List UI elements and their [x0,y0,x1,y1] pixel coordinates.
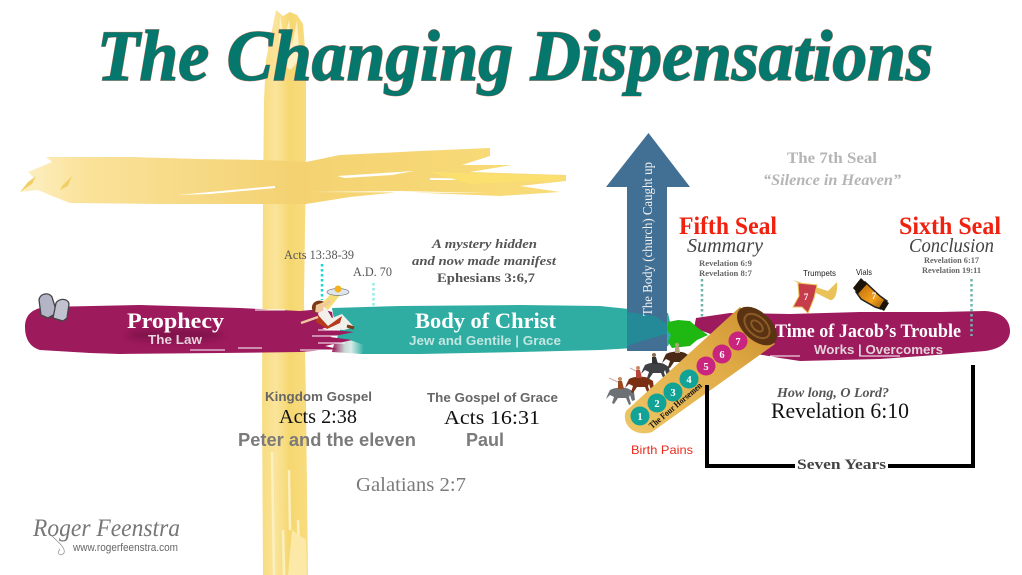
text: Fifth Seal: Summary [687,235,763,257]
title: The Changing Dispensations [97,16,933,96]
brush band: Prophecy [25,305,354,354]
logo [32,515,180,555]
title: The Changing Dispensations [97,16,933,96]
scroll seals: 5 [703,362,709,373]
label: Acts 13:38-39: Acts 13:38-39 [284,247,354,262]
text: Gospel of Grace [427,391,558,450]
text: Fifth Seal: Revelation 8:7 [699,268,753,278]
icon: vial: 7 [872,291,877,301]
dotted line: Acts 13 [321,264,323,300]
text: Kingdom Gospel [238,390,416,450]
scroll end [730,299,784,353]
label: Birth Pains: Birth Pains [631,443,693,457]
icon: trumpet [793,280,837,313]
text: Sixth Seal: Conclusion [909,235,994,257]
cross: horizontal beam [20,148,566,204]
text: Prophecy [127,308,224,347]
scroll seals: 1 [637,412,643,423]
dotted line: Fifth Seal [701,279,703,318]
scroll seals: 4 [686,375,692,386]
text: Body of Christ [409,308,561,348]
label: Seven Years: Seven Years [797,457,886,473]
text: Kingdom Gospel: Peter and the eleven [238,430,416,450]
brush band: Body of Christ [332,305,672,354]
text: mystery hidden: Ephesians 3:6,7 [437,270,536,285]
scroll [625,299,784,433]
text: Sixth Seal: Revelation 19:11 [922,265,981,275]
arrow label: The Body (church) Caught up [641,162,656,316]
text: 7th seal: “Silence in Heaven” [763,172,901,189]
text: Gospel of Grace: The Gospel of Grace [427,391,558,405]
text: Fifth Seal [679,213,777,278]
four horsemen [606,343,691,405]
text: Time of Jacob's Trouble: Works | Overcomers [814,342,943,357]
label: Vials: Vials [856,267,872,277]
text: How long: How long, O Lord? [776,385,889,400]
text: Prophecy: Prophecy [127,308,224,333]
brush band: Time of Jacob's Trouble [694,311,1010,361]
logo: Roger Feenstra [32,515,180,542]
horse 1 [606,377,635,405]
text: Fifth Seal: Revelation 6:9 [699,258,752,268]
scroll label: The Four Horsemen [647,380,704,431]
label: A.D. 70: A.D. 70 [353,264,392,279]
streaks of teal over arrow [627,312,667,346]
text: Fifth Seal: Fifth Seal [679,213,777,240]
text: Gospel of Grace: Acts 16:31 [444,407,540,429]
text: 7th seal: The 7th Seal [787,150,878,167]
logo: www.rogerfeenstra.com [72,542,178,554]
text: mystery hidden: and now made manifest [412,253,556,268]
green brush [667,320,708,348]
label: Trumpets: Trumpets [803,268,836,278]
text: How long [771,385,909,423]
scroll body [625,307,775,433]
text: Prophecy: The Law [148,332,203,347]
scroll seals: 6 [719,350,725,361]
text: mystery hidden: A mystery hidden [431,236,537,251]
text: Sixth Seal: Sixth Seal [899,213,1001,240]
icon: vial [853,278,889,311]
text: Body of Christ: Body of Christ [415,308,557,333]
text: mystery hidden [412,236,556,285]
dotted line: A.D. 70 [372,283,375,335]
scroll seals: 2 [654,399,660,410]
scroll seals: 7 [735,337,741,348]
text: Time of Jacob's Trouble: Time of Jacob’s Trouble [775,321,961,342]
text: Sixth Seal [899,213,1001,275]
text: Body of Christ: Jew and Gentile | Grace [409,333,561,348]
text: Sixth Seal: Revelation 6:17 [924,255,980,265]
arrow: The Body caught up [606,133,690,351]
text: Gospel of Grace: Paul [466,430,504,450]
icon: trumpet: 7 [804,292,809,302]
text: How long: Revelation 6:10 [771,398,909,423]
text: Galatians: Galatians 2:7 [356,474,466,496]
bracket: seven years [707,365,973,466]
cross: vertical beam [262,10,308,575]
cross [20,10,566,575]
text: Time of Jacob's Trouble [775,321,961,357]
text: Kingdom Gospel: Acts 2:38 [279,406,357,428]
scroll seals: 3 [670,388,676,399]
text: Kingdom Gospel: Kingdom Gospel [265,390,372,404]
dotted line: Sixth Seal [970,279,973,336]
horse 3 [641,353,670,380]
scroll seals [630,332,748,426]
text: 7th seal [763,150,901,189]
icon: running man with cloud [301,286,354,330]
horse 4 [662,343,691,369]
icon: stone tablets [39,294,69,321]
horse 2 [625,366,654,394]
